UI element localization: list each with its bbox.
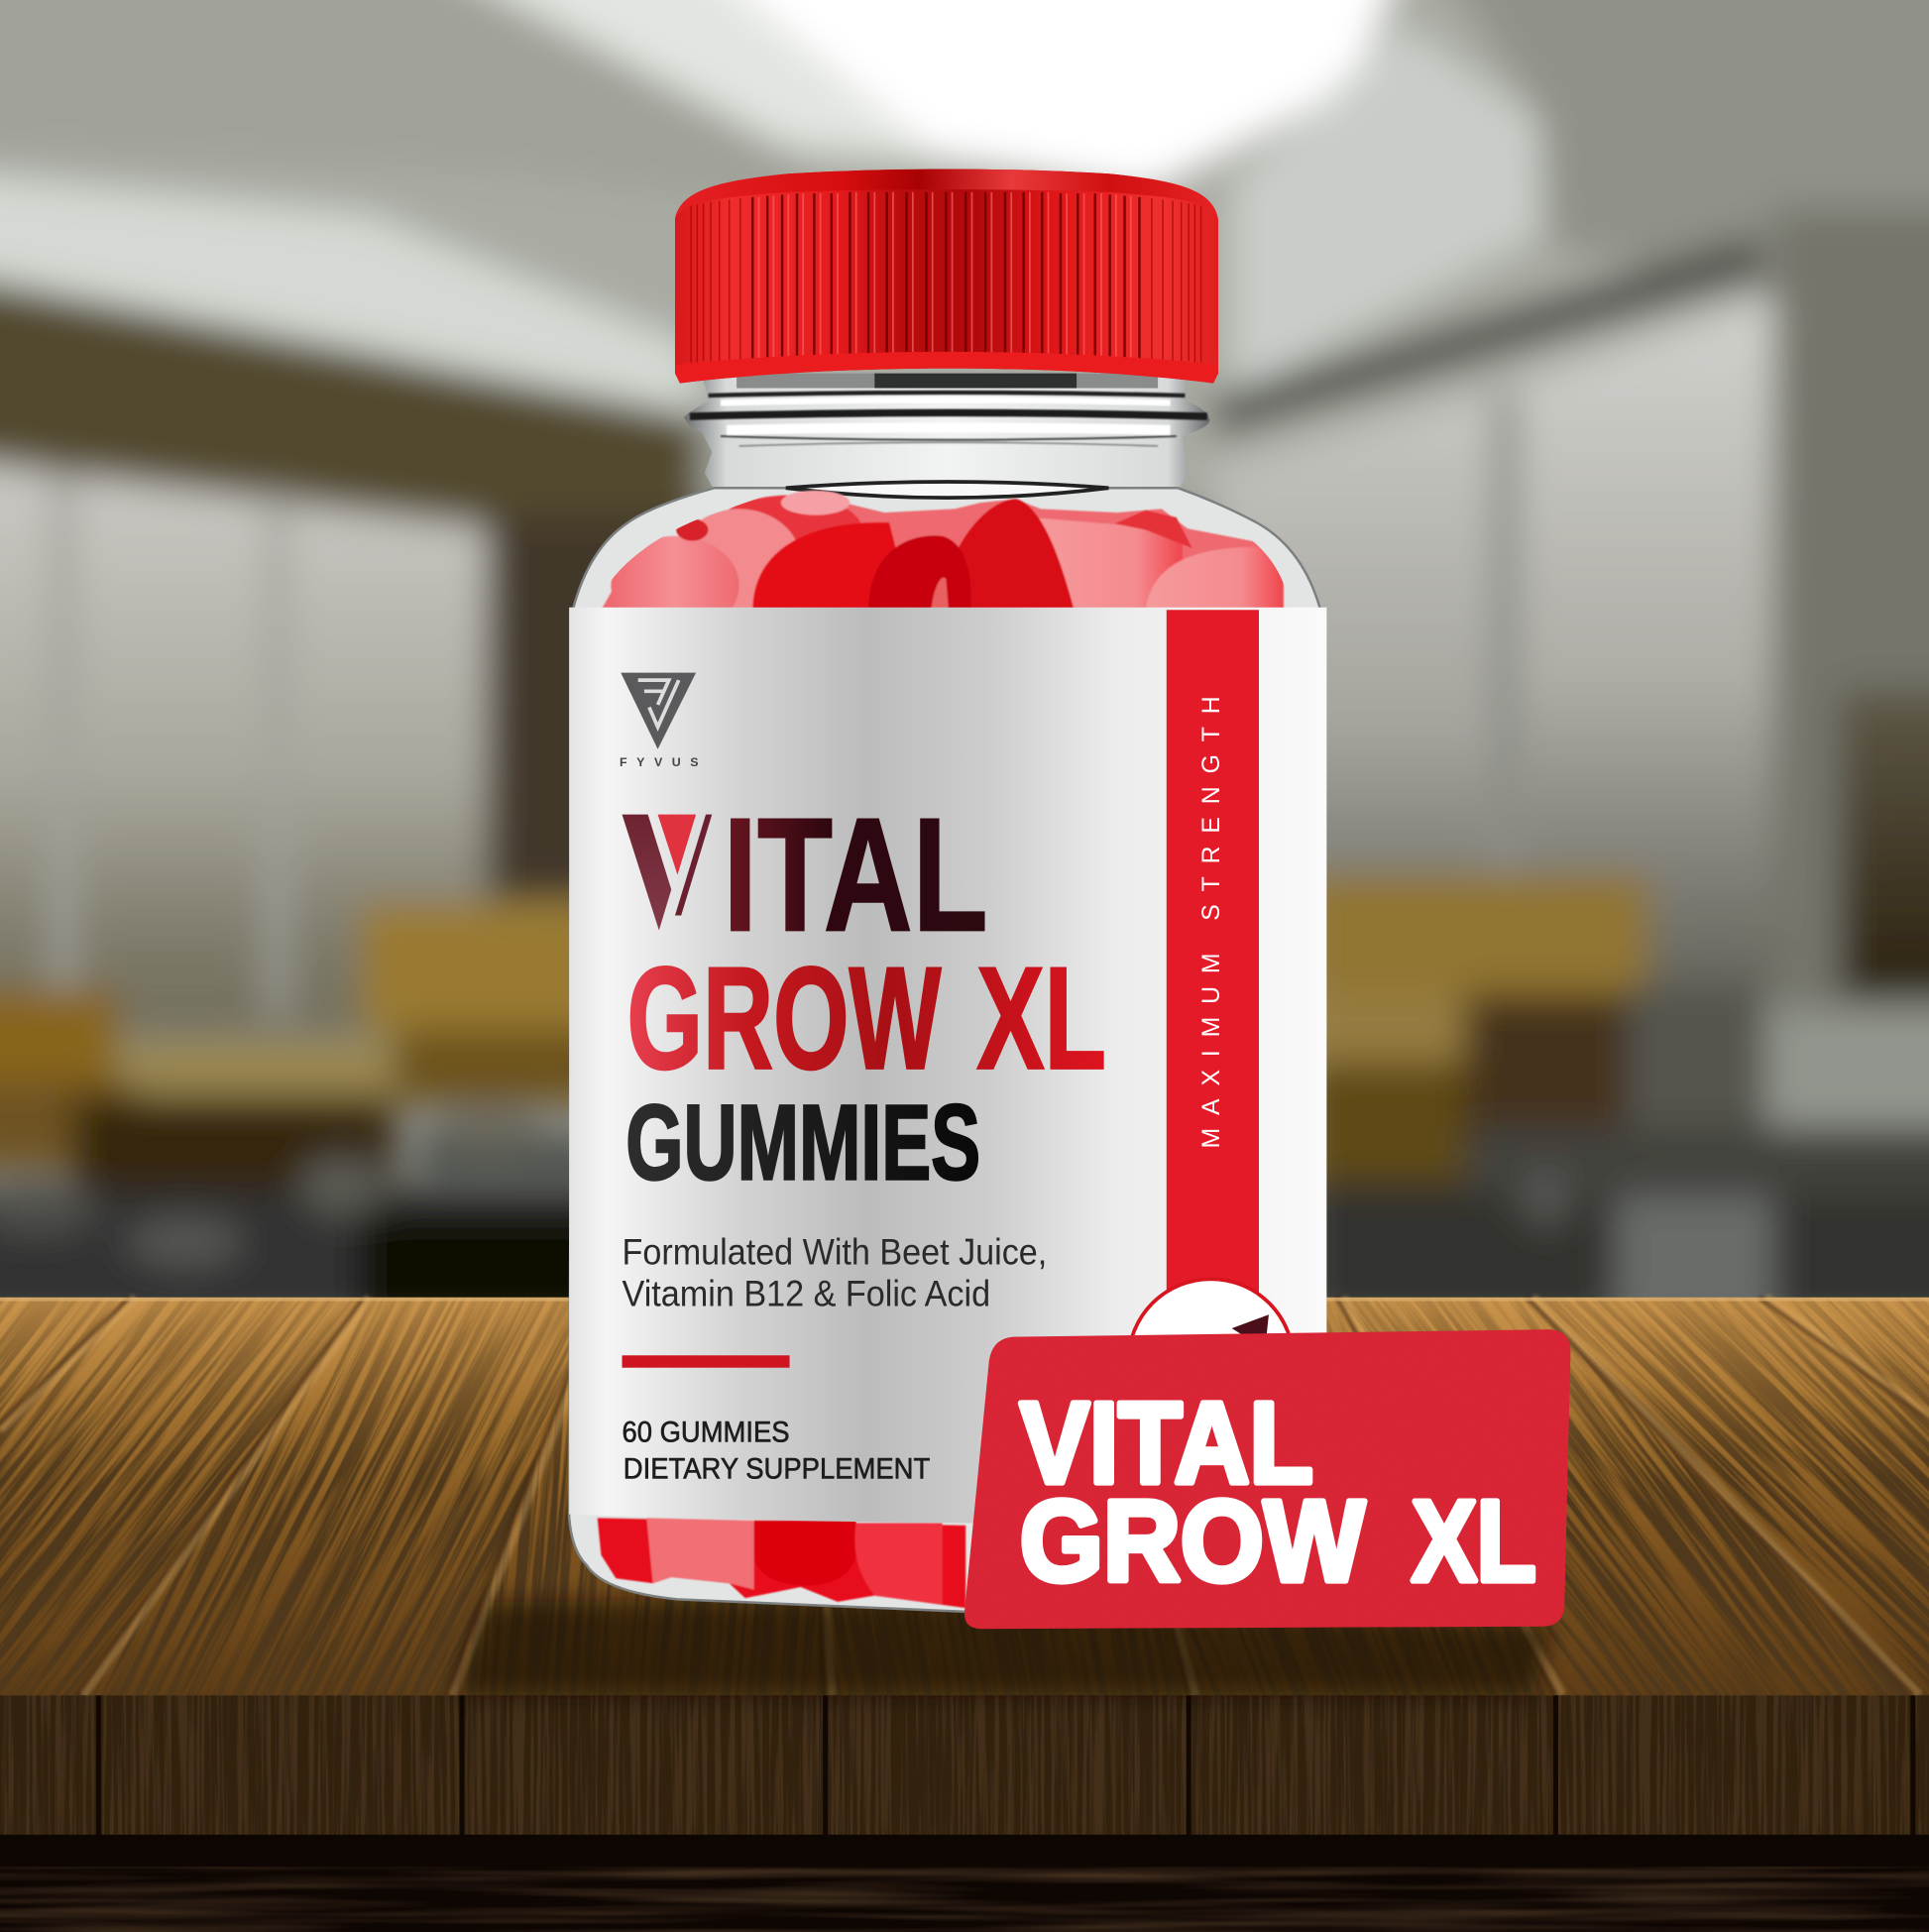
gummies at top	[602, 490, 1285, 608]
red divider	[623, 1355, 790, 1368]
jar and card contact shadow	[456, 1597, 1552, 1695]
title: VITAL	[623, 785, 988, 965]
title: GROW XL: XL	[976, 938, 1106, 1100]
blurred room background	[0, 0, 1929, 1324]
product details	[623, 1416, 930, 1486]
title: GROW XL: GROW	[627, 938, 942, 1100]
wooden table top	[0, 1293, 1929, 1695]
red screw cap	[675, 170, 1218, 384]
red vertical strip	[1167, 610, 1259, 1300]
title: VITAL: ITAL	[723, 785, 988, 965]
tagline	[623, 1230, 1047, 1314]
brand logo: FV triangle	[620, 673, 699, 769]
glass jar	[569, 374, 1320, 1617]
table front edge	[0, 1695, 1929, 1836]
card text: GROW XL: XL	[1412, 1478, 1536, 1606]
lens shape at jar base of neck	[786, 482, 1108, 498]
gummies at bottom	[598, 1518, 965, 1608]
card text: VITAL: VITAL	[1020, 1379, 1313, 1507]
card text: GROW XL: GROW	[1020, 1478, 1365, 1606]
product details: 60 GUMMIES	[623, 1416, 790, 1448]
jar body glass	[569, 488, 1320, 1617]
brand logo: FV triangle: FYVUS	[620, 755, 699, 769]
title: GUMMIES: GUMMIES	[625, 1082, 980, 1202]
tagline: Formulated With Beet Juice,	[623, 1230, 1047, 1272]
red name card	[964, 1329, 1570, 1629]
product label	[569, 608, 1326, 1524]
tagline: Vitamin B12 & Folic Acid	[623, 1273, 990, 1314]
seal circle	[1128, 1279, 1294, 1444]
jar neck	[684, 374, 1209, 491]
vertical text: maximum strength: MAXIMUM STRENGTH	[1198, 696, 1225, 1148]
product details: DIETARY SUPPLEMENT	[624, 1453, 930, 1486]
table underside	[0, 1835, 1929, 1932]
